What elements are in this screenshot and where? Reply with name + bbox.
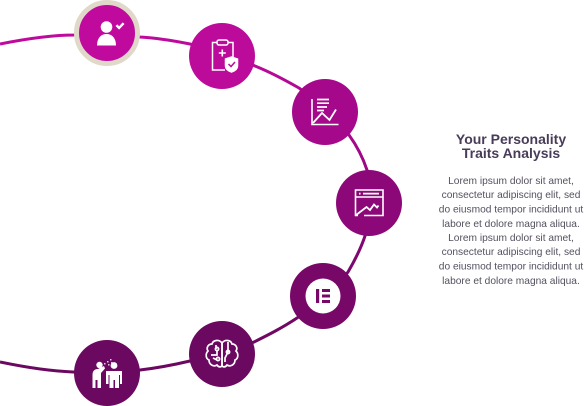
node 1: person with check [76,2,138,64]
icon: browser chart [356,190,383,216]
body text [439,176,583,287]
body text: Lorem ipsum dolor sit amet, [448,176,574,187]
heading [456,131,566,161]
node 2: clipboard with shield [189,23,255,89]
body text: do eiusmod tempor incididunt ut [439,204,583,216]
icon: line chart with list [312,99,338,124]
heading: Your Personality [456,131,566,147]
node 5: badge with E mark [290,263,356,329]
node 3: chart with list [292,79,358,145]
node 4: browser window with chart [336,170,402,236]
body text: labore et dolore magna aliqua. [442,276,580,287]
arc connector line [0,35,370,372]
icon: person with check [97,21,125,46]
body text: consectetur adipiscing elit, sed [442,247,581,258]
heading: Traits Analysis [462,145,560,161]
icon: circuit brain [206,340,238,367]
node 6: circuit brain [189,321,255,387]
body text: consectetur adipiscing elit, sed [442,190,581,201]
node 7: two people spray [74,340,140,406]
icon: round E logo [306,278,340,314]
body text: labore et dolore magna aliqua. [442,219,580,230]
body text: Lorem ipsum dolor sit amet, [448,233,574,244]
body text: do eiusmod tempor incididunt ut [439,262,583,272]
icon: clipboard with shield [212,40,238,72]
icon: person spraying another person [92,359,122,388]
